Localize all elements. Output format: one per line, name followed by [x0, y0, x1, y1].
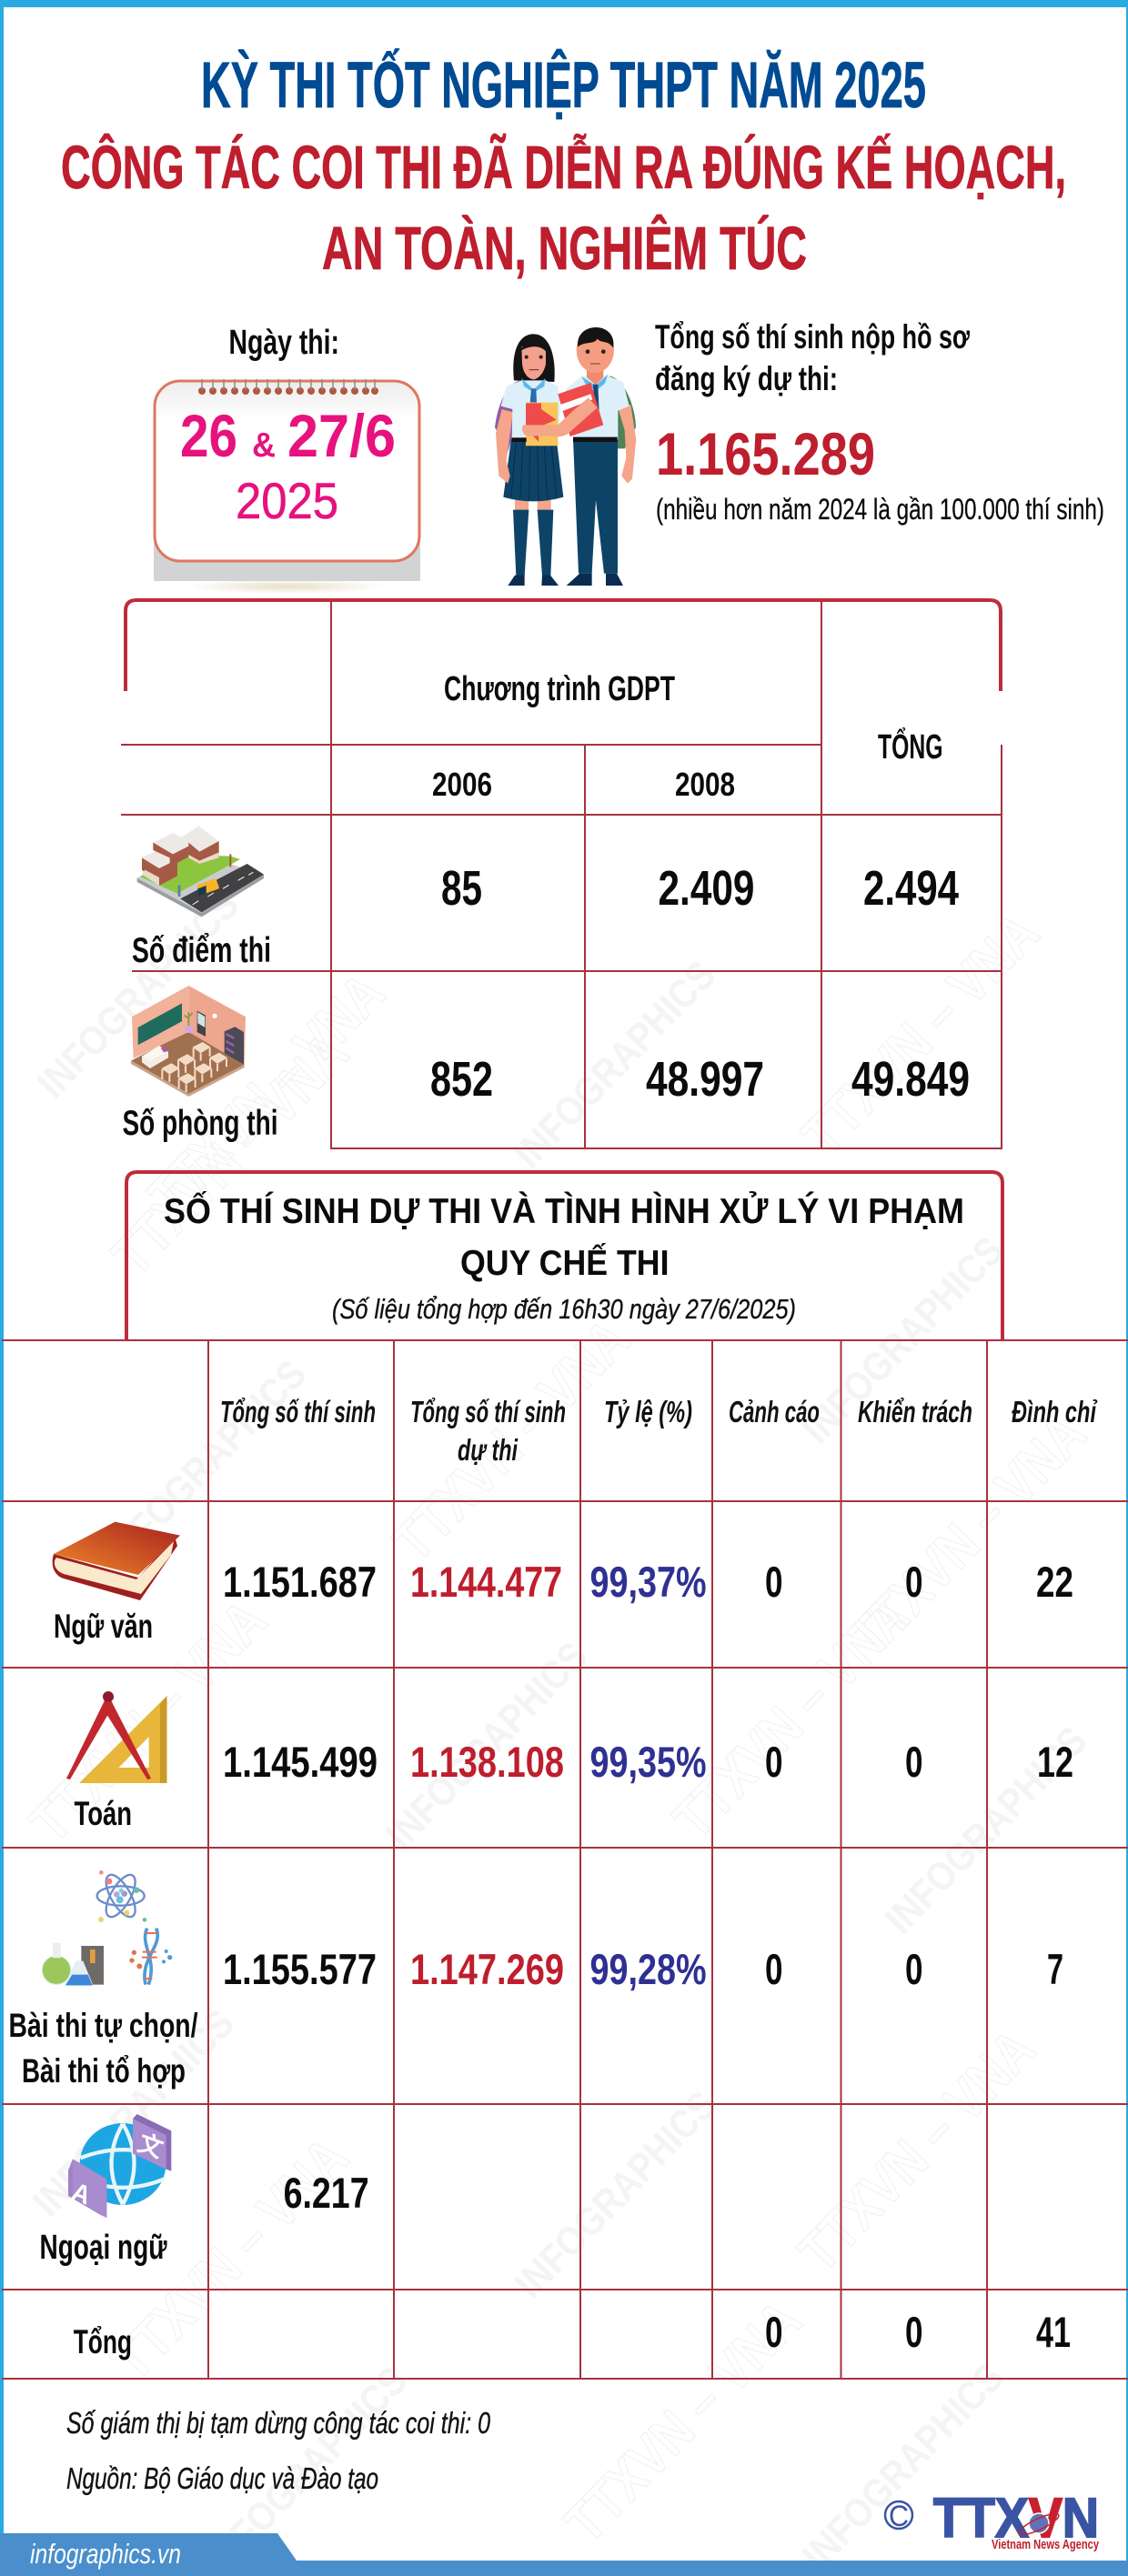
girl skirt [503, 439, 563, 501]
icon: science [42, 1870, 172, 1986]
column headers: Cảnh cáo [729, 1395, 820, 1428]
row: mathematics: 1.145.499 [223, 1738, 378, 1786]
icon: globe and language cards [67, 2114, 171, 2218]
boy shirt [566, 376, 629, 439]
column header: program: Chương trình GDPT [444, 670, 675, 708]
row: elective exams: 99,28% [589, 1945, 706, 1993]
row: mathematics: 0 [765, 1738, 782, 1786]
values: exam sites: 85 [441, 861, 482, 916]
panel: exam sites and rooms table: 48.997 [646, 1052, 764, 1107]
boy collar and tie [581, 375, 608, 391]
table heading note: (Số liệu tổng hợp đến 16h30 ngày 27/6/2025) [332, 1293, 796, 1325]
watermark pattern: TTXVN – VNA [553, 2289, 813, 2555]
boy neck and face [587, 370, 603, 385]
girl legs [515, 500, 529, 512]
panel: exam sites and rooms table: 2.494 [863, 861, 959, 916]
row: mathematics: 12 [1037, 1738, 1073, 1786]
row: elective exams [9, 1870, 1063, 2090]
watermark pattern: TTXVN – VNA [791, 901, 1051, 1168]
row: foreign language: Ngoại ngữ [40, 2229, 167, 2267]
watermark pattern: INFOGRAPHICS [197, 2359, 416, 2576]
girl arms [496, 409, 513, 484]
girl shoes [508, 576, 525, 586]
panel: exam sites and rooms table: 2.409 [659, 861, 755, 916]
yellow book [526, 403, 558, 446]
watermark pattern: INFOGRAPHICS [794, 2355, 1012, 2576]
girl hair fringe [520, 342, 548, 353]
panel: candidates and violations table [2, 1172, 1128, 2379]
boy shoes [567, 574, 592, 586]
icon: calendar with exam date: 27/6 [287, 402, 396, 469]
row: foreign language [40, 2114, 369, 2267]
boy backpack [609, 376, 636, 448]
watermark pattern: TTXVN – VNA [381, 1308, 641, 1574]
row: mathematics [66, 1691, 1073, 1832]
date: 26 & 27/6: 26 [180, 402, 237, 469]
row: elective exams: 0 [765, 1945, 782, 1993]
watermark pattern: TTXVN – VNA [100, 1021, 360, 1288]
watermark pattern: INFOGRAPHICS [378, 1634, 596, 1858]
registered label: Tổng số thí sinh nộp hồ sơ [655, 318, 970, 356]
boy trousers [573, 438, 618, 574]
table heading box [126, 1172, 1002, 1339]
watermark pattern: INFOGRAPHICS [506, 953, 724, 1177]
row: total [74, 2308, 1071, 2360]
watermark pattern: INFOGRAPHICS [96, 1352, 315, 1576]
boy arm [618, 405, 636, 484]
column headers: Tổng số thí sinh [410, 1395, 566, 1428]
icon: calendar with exam date [154, 379, 420, 594]
watermark pattern: INFOGRAPHICS [29, 883, 247, 1107]
column headers: Tỷ lệ (%) [604, 1395, 692, 1428]
watermark pattern: INFOGRAPHICS [507, 2083, 725, 2307]
row: literature: 22 [1036, 1558, 1073, 1606]
row label: exam rooms: Số phòng thi [122, 1104, 278, 1143]
icon: school [137, 826, 264, 917]
girl forearm [522, 397, 598, 436]
red book [558, 383, 603, 436]
table frame and grid [121, 600, 1002, 1148]
column headers: Tổng số thí sinh [220, 1395, 376, 1428]
registered candidates block: đăng ký dự thi: [655, 360, 838, 397]
row: literature: 1.144.477 [410, 1558, 562, 1606]
girl shirt [501, 380, 560, 439]
row: total: 0 [765, 2308, 782, 2356]
watermark pattern: TTXVN – VNA [661, 1585, 922, 1851]
row: elective exams: 0 [905, 1945, 922, 1993]
logo: TTXVN: TTXVN [933, 2487, 1099, 2549]
table grid [2, 1340, 1128, 2379]
title [61, 49, 1066, 283]
row: mathematics: 1.138.108 [410, 1738, 564, 1786]
icon: globe and language cards: 文 [135, 2130, 166, 2163]
registered number: 1.165.289 [656, 420, 875, 487]
icon: classroom [131, 986, 246, 1097]
boy belt [573, 437, 618, 442]
watermark pattern: TTXVN – VNA [100, 2126, 360, 2392]
row: elective exams: Bài thi tổ hợp [22, 2052, 186, 2090]
row: literature: 0 [905, 1558, 922, 1606]
column headers [220, 1395, 1098, 1467]
table heading line 2: QUY CHẾ THI [460, 1243, 670, 1283]
girl hair [513, 334, 555, 382]
title line 3: AN TOÀN, NGHIÊM TÚC [322, 215, 807, 283]
date: year: 2025 [236, 472, 338, 529]
column header: 2008: 2008 [675, 766, 735, 803]
row: mathematics: Toán [75, 1795, 132, 1832]
girl collar and tie [521, 378, 545, 393]
row: literature: Ngữ văn [54, 1608, 153, 1645]
row: mathematics: 99,35% [589, 1738, 706, 1786]
girl face [521, 345, 546, 379]
panel: exam sites and rooms table [121, 600, 1002, 1148]
watermark pattern: TTXVN – VNA [18, 1589, 278, 1855]
watermark pattern: INFOGRAPHICS [25, 2001, 243, 2225]
row: elective exams: 7 [1047, 1945, 1063, 1993]
values: exam rooms: 852 [430, 1052, 493, 1107]
row: literature: 0 [765, 1558, 782, 1606]
footer bar [0, 2533, 1128, 2576]
registered candidates block [655, 318, 1104, 526]
row: elective exams: 1.155.577 [223, 1945, 377, 1993]
girl backpack [495, 380, 521, 452]
watermark pattern: INFOGRAPHICS [877, 1719, 1095, 1942]
watermark pattern [18, 883, 1098, 2576]
source: Nguồn: Bộ Giáo dục và Đào tạo [66, 2461, 378, 2495]
column header: total: TỔNG [878, 726, 942, 767]
exam date label: Ngày thi: [229, 324, 339, 362]
row: literature: 99,37% [589, 1558, 706, 1606]
column header: 2006: 2006 [432, 766, 492, 803]
icon: compass and set square [66, 1691, 167, 1783]
icon: two students [495, 327, 636, 586]
icon: book [53, 1522, 180, 1600]
watermark pattern: TTXVN – VNA [787, 2018, 1047, 2284]
row: total: Tổng [74, 2323, 132, 2360]
panel: exam sites and rooms table: 49.849 [851, 1052, 970, 1107]
row: elective exams: Bài thi tự chọn/ [9, 2007, 198, 2044]
row label: exam sites: Số điểm thi [132, 931, 271, 970]
icon: calendar with exam date: & [252, 426, 276, 465]
website: infographics.vn [30, 2538, 181, 2570]
row: mathematics: 0 [905, 1738, 922, 1786]
logo: TTXVN: C [889, 2500, 909, 2532]
girl socks [513, 510, 529, 576]
watermark pattern: TTXVN – VNA [136, 961, 397, 1228]
note: suspended invigilators: Số giám thị bị tạm dừng công tác coi thi: 0 [66, 2406, 490, 2440]
column headers: dự thi [458, 1433, 519, 1467]
watermark pattern: INFOGRAPHICS [794, 1228, 1012, 1452]
row: total: 0 [905, 2308, 922, 2356]
row: literature: 1.151.687 [223, 1558, 377, 1606]
row: elective exams: 1.147.269 [410, 1945, 564, 1993]
row: literature [53, 1522, 1073, 1645]
icon: globe and language cards: A [67, 2178, 95, 2210]
column headers: Đình chỉ [1012, 1395, 1098, 1428]
row: total: 41 [1036, 2308, 1071, 2356]
row: foreign language: 6.217 [284, 2169, 369, 2217]
column headers: Khiển trách [858, 1395, 972, 1428]
table heading line 1: SỐ THÍ SINH DỰ THI VÀ TÌNH HÌNH XỬ LÝ VI PHẠM [164, 1190, 964, 1231]
